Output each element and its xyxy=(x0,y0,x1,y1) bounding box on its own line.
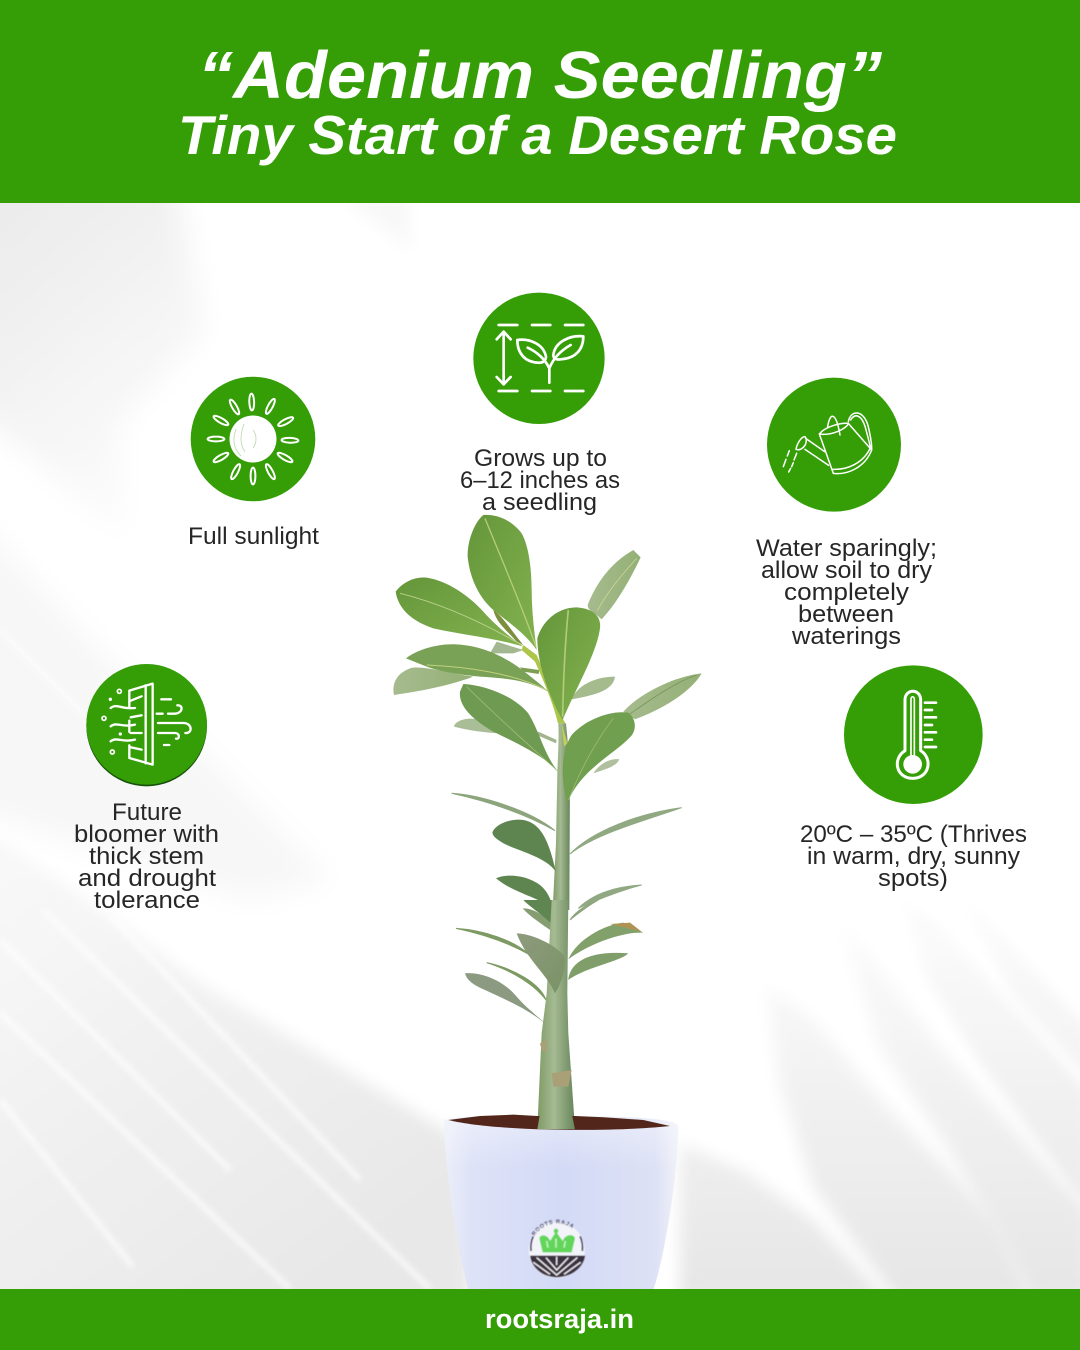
label: temperature xyxy=(800,821,1027,892)
soil xyxy=(448,1115,670,1130)
plant: lower stem and leaves xyxy=(456,900,643,1128)
pot logo: ROOTS RAJA xyxy=(531,1218,574,1236)
potted adenium plant xyxy=(393,514,702,1289)
label: watering xyxy=(756,535,937,650)
label: height: 6–12 inches as xyxy=(460,467,620,494)
label: height: a seedling xyxy=(482,489,597,516)
feature: temperature xyxy=(800,665,1027,892)
feature: sunlight xyxy=(188,377,319,550)
label: watering: waterings xyxy=(791,623,901,650)
icon: sun xyxy=(191,377,315,501)
label: temperature: spots) xyxy=(878,865,948,892)
label: height: Grows up to xyxy=(474,445,607,472)
pot xyxy=(444,1114,678,1289)
label: temperature: in warm, dry, sunny xyxy=(807,843,1020,870)
plant: upper foliage xyxy=(393,515,702,910)
label: future bloomer: Future xyxy=(112,799,182,826)
label: future bloomer xyxy=(74,799,219,914)
feature: watering xyxy=(756,378,937,650)
label: sunlight: Full sunlight xyxy=(188,523,319,550)
icon: watering can xyxy=(767,378,901,512)
icon: thermometer xyxy=(844,665,983,804)
label: future bloomer: thick stem xyxy=(89,843,204,870)
header band xyxy=(0,0,1080,203)
label: future bloomer: and drought xyxy=(78,865,216,892)
label: height xyxy=(460,445,620,516)
title line 1: “Adenium Seedling” xyxy=(198,38,883,113)
label: future bloomer: tolerance xyxy=(94,887,200,914)
pot logo xyxy=(528,1218,586,1278)
label: watering: between xyxy=(798,601,894,628)
title line 2: Tiny Start of a Desert Rose xyxy=(178,104,897,166)
label: watering: completely xyxy=(784,579,909,606)
stem: upper xyxy=(553,723,570,910)
label: watering: Water sparingly; xyxy=(756,535,937,562)
feature: plant height xyxy=(460,293,620,516)
icon: air filter xyxy=(86,664,207,786)
icon: seedling height xyxy=(473,293,605,424)
label: future bloomer: bloomer with xyxy=(74,821,219,848)
label: temperature: 20ºC – 35ºC (Thrives xyxy=(800,821,1027,848)
label: watering: allow soil to dry xyxy=(761,557,932,584)
feature: future bloomer xyxy=(74,664,219,914)
website: rootsraja.in xyxy=(485,1304,634,1334)
footer band xyxy=(0,1289,1080,1350)
